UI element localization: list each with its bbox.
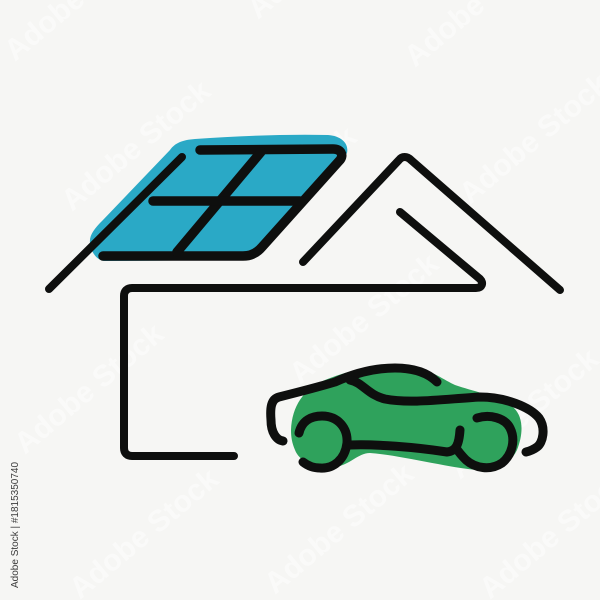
- solar panel frame: [103, 149, 342, 256]
- stock watermarks: Adobe Stock: [55, 74, 217, 217]
- stock watermarks: Adobe Stock: [8, 317, 170, 460]
- stock watermarks: Adobe Stock: [201, 120, 363, 263]
- car roof and rear: [271, 368, 437, 441]
- car body line and front: [350, 380, 543, 452]
- car green fill: [291, 366, 522, 470]
- front wheel arch: [456, 416, 513, 468]
- stock watermarks: Adobe Stock: [283, 247, 445, 390]
- roof left slope: [49, 157, 182, 289]
- inner gable and house wall: [124, 212, 482, 456]
- solar panel blue fill: [90, 135, 347, 261]
- solar panel horizontal mullion: [153, 196, 300, 206]
- stock watermarks: Adobe Stock: [258, 457, 420, 600]
- icon: solar panel: [90, 135, 347, 261]
- car sill: [350, 430, 460, 452]
- icon: electric car: [271, 366, 543, 470]
- rear wheel arch: [299, 416, 347, 468]
- roof right slope: [303, 157, 560, 290]
- solar panel vertical mullion: [177, 152, 261, 252]
- stock credit text: Adobe Stock | #1815350740: [10, 462, 21, 588]
- icon: house outline: [49, 157, 560, 456]
